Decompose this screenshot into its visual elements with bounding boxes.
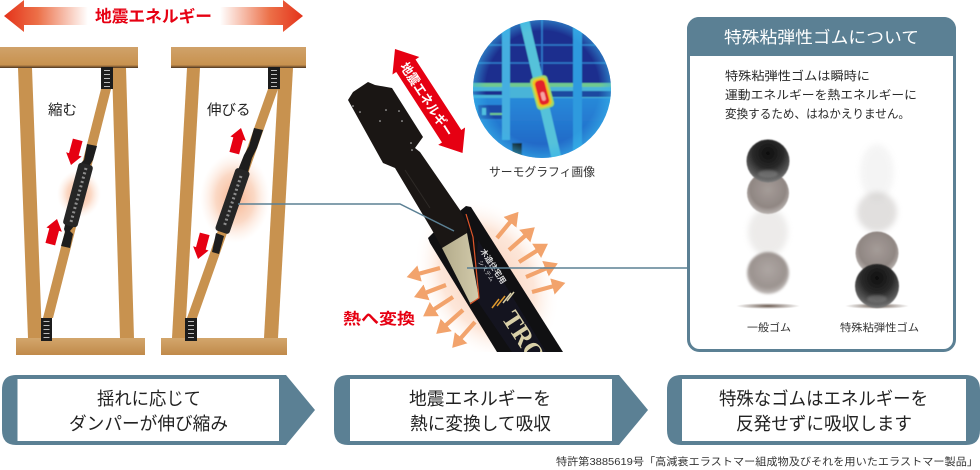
label: extend: 伸びる xyxy=(207,102,250,119)
panel text: 特殊粘弾性ゴムは瞬時に xyxy=(725,68,870,83)
connector lines xyxy=(238,204,688,268)
caption: thermography: サーモグラフィ画像 xyxy=(489,165,595,179)
arrow: pull down xyxy=(190,232,212,261)
damper lettering: TRO xyxy=(496,305,551,369)
step 2 chevron: 熱に変換して吸収 xyxy=(410,414,551,434)
frame: extended brace xyxy=(161,47,306,355)
red energy arrow on damper xyxy=(382,40,476,162)
damper inner plate xyxy=(348,82,467,248)
damper lettering: システム xyxy=(476,259,495,283)
panel header xyxy=(687,17,956,56)
damper lettering xyxy=(478,248,542,352)
rubber layer xyxy=(442,233,479,303)
ball captions xyxy=(747,321,919,334)
balls: viscoelastic rubber xyxy=(845,144,909,309)
balls: general rubber xyxy=(736,140,800,309)
ball captions: 一般ゴム xyxy=(747,321,791,334)
damper outer body xyxy=(428,206,563,352)
damper closeup xyxy=(348,82,566,352)
arrow: push down xyxy=(63,138,85,167)
step 3 box xyxy=(667,375,980,445)
step 2 chevron xyxy=(334,375,648,445)
step 1 chevron: ダンパーが伸び縮み xyxy=(69,414,228,434)
step 1 chevron xyxy=(2,375,315,445)
label: convert to heat: 熱へ変換 xyxy=(343,309,416,328)
frame: compressed brace xyxy=(0,47,145,355)
panel text: 変換するため、はねかえりません。 xyxy=(725,106,910,121)
arrow: pull up xyxy=(227,126,249,155)
seismic energy double arrow xyxy=(4,0,303,32)
seismic energy double arrow: 地震エネルギー xyxy=(95,7,212,26)
step 3 box: 反発せずに吸収します xyxy=(736,414,912,434)
orange edge xyxy=(466,214,479,304)
step 2 chevron: 地震エネルギーを xyxy=(409,389,551,409)
step 3 box: 特殊なゴムはエネルギーを xyxy=(719,389,928,409)
panel text xyxy=(725,68,917,121)
damper lettering: 木造住宅用 xyxy=(478,247,508,286)
patent footnote: 特許第3885619号「高減衰エラストマー組成物及びそれを用いたエラストマー製品」 xyxy=(556,455,978,468)
step 1 chevron: 揺れに応じて xyxy=(97,389,201,409)
heat arrows xyxy=(418,221,554,339)
panel: special viscoelastic rubber: 特殊粘弾性ゴムについて xyxy=(724,27,919,47)
arrow: push up xyxy=(43,217,65,246)
red energy arrow on damper: 地震エネルギー xyxy=(397,60,456,139)
thermography image xyxy=(470,15,615,179)
ball captions: 特殊粘弾性ゴム xyxy=(840,321,919,334)
panel: special viscoelastic rubber xyxy=(687,17,956,350)
label: shrink: 縮む xyxy=(48,102,77,119)
panel text: 運動エネルギーを熱エネルギーに xyxy=(725,88,917,102)
